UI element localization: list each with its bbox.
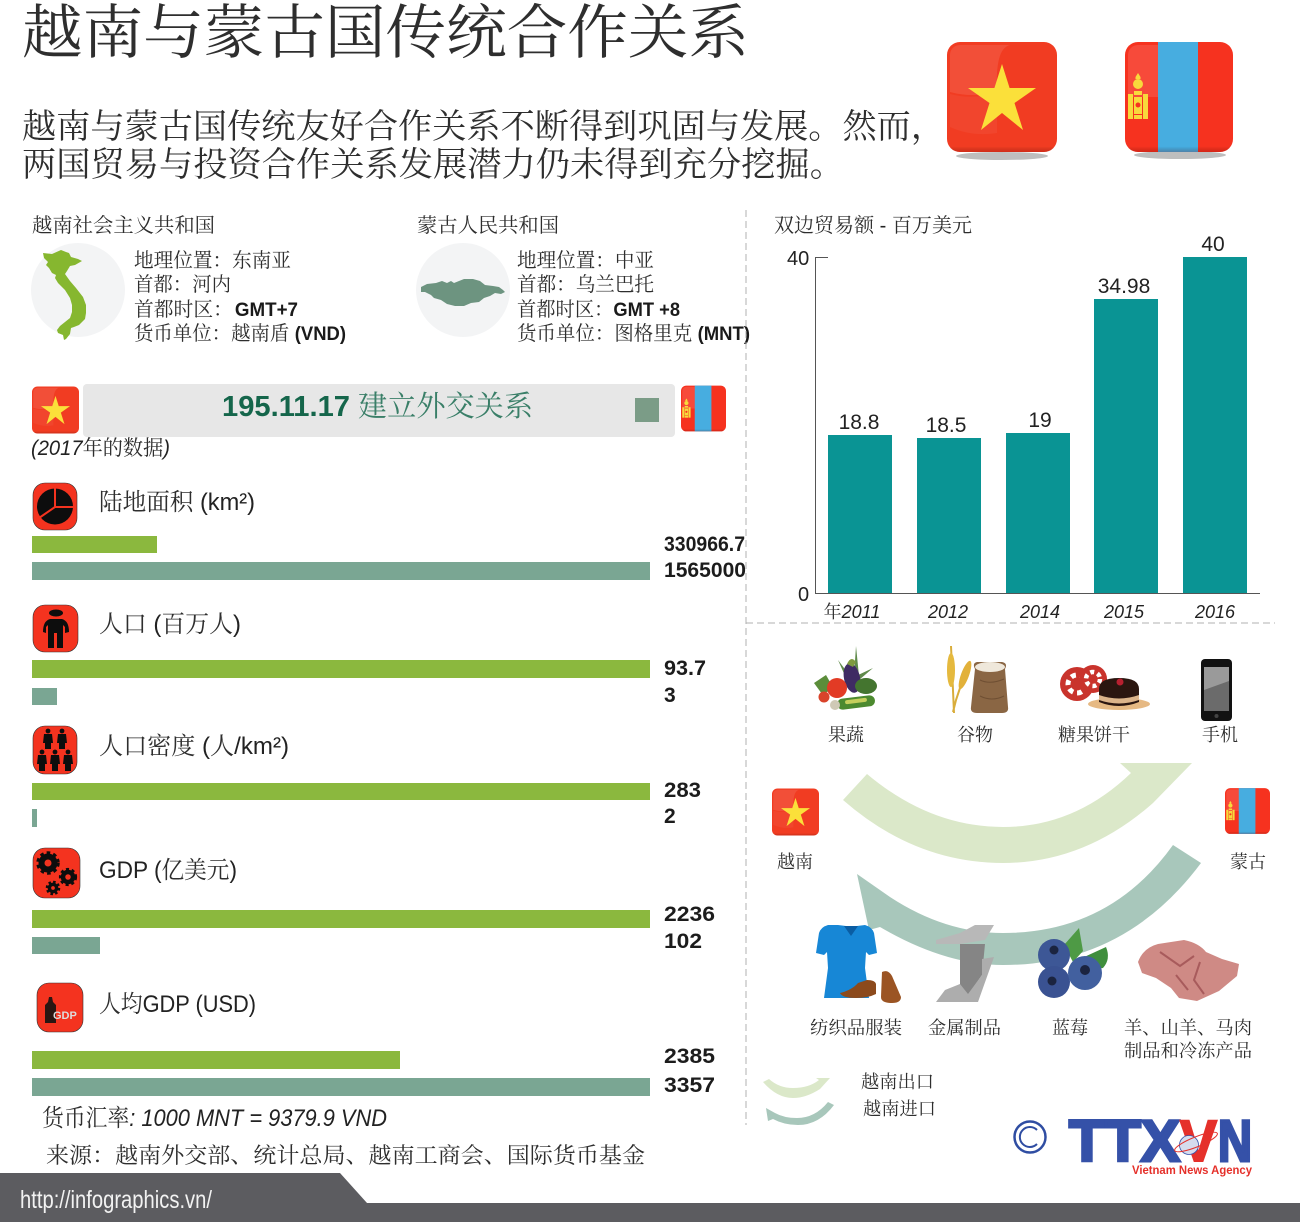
icon: large Vietnam flag [947,42,1057,160]
text: Vietnam details [134,249,346,345]
banner background [83,384,675,437]
bar: Mongolia population [32,688,57,705]
icon: GDP per person: GDP [53,1010,77,1022]
logo letters [1069,1109,1252,1174]
logo: TTXVN [1014,1109,1253,1177]
panel: Mongolia facts [416,214,750,345]
agency name: Vietnam News Agency [1132,1165,1253,1177]
label: 陆地面积 (km²) [99,489,255,516]
label: 纺织品服装 [810,1018,902,1038]
bar 2011: 年2011 [824,601,880,622]
icon: meat [1138,940,1239,1001]
value: 102 [664,930,702,953]
bar 2016 [1183,233,1247,622]
heading: Mongolia name: 蒙古人民共和国 [417,214,559,237]
bar chart: bilateral trade [774,214,1260,622]
icon: pie chart [33,483,77,530]
label: 羊、山羊、马肉 [1124,1018,1252,1038]
icon: Mongolia map [416,243,510,337]
panel: Vietnam facts [31,214,346,345]
value: 330966.7 [664,533,745,556]
value: 2385 [664,1045,715,1068]
data year note: (2017年的数据) [31,437,170,460]
value: 93.7 [664,657,706,680]
title: 越南与蒙古国传统合作关系 [22,0,749,66]
bar: Mongolia density [32,809,37,827]
copyright mark [1014,1122,1046,1152]
text: Vietnam details: 首都时区：GMT+7 [134,298,298,321]
label: 金属制品 [928,1018,1001,1038]
product: textiles [810,925,902,1038]
label: 果蔬 [828,725,864,745]
bar 2015: 2015 [1103,602,1145,622]
icon: vegetables [814,646,877,710]
text: Vietnam details: 货币单位：越南盾 (VND) [134,322,346,345]
label: 糖果饼干 [1058,725,1130,745]
bar 2014: 2014 [1019,602,1060,622]
chart axes [816,258,1260,594]
country: Mongolia [1225,788,1270,872]
legend: export label: 越南出口 [861,1071,934,1092]
label: 谷物 [957,725,993,745]
label: 蒙古 [1230,852,1266,872]
label: 蓝莓 [1052,1018,1088,1038]
chart title: 双边贸易额 - 百万美元 [774,214,972,237]
label: 人口 (百万人) [99,611,241,638]
footer bar [0,1173,1300,1222]
icon: person [33,605,78,652]
text: Mongolia details [517,249,750,345]
panel: land area [32,483,746,582]
banner text: 建立外交关系 [358,390,533,423]
bar: Vietnam GDP per capita [32,1051,400,1069]
bar: Vietnam GDP [32,910,650,928]
bar 2016: 2016 [1194,602,1236,622]
intro text: 两国贸易与投资合作关系发展潜力仍未得到充分挖掘。 [22,146,844,184]
label: 人口密度 (人/km²) [99,733,289,760]
icon: GDP per person [37,983,83,1032]
icon: mobile phone [1201,659,1232,721]
product: metal [928,925,1001,1038]
label: 越南 [777,851,813,872]
panel: population density [32,726,701,828]
axis label 40: 40 [787,248,809,270]
legend square [635,398,659,422]
product: vegetables [814,646,877,745]
legend: import arrow [766,1102,834,1125]
bar 2014 [1006,409,1070,622]
bar 2012 [917,414,981,622]
icon: large Mongolia flag [1125,42,1233,159]
value: 283 [664,779,701,802]
label [1124,1018,1252,1061]
label: 人均GDP (USD) [99,991,256,1018]
icon: shirt and shoes [816,925,901,1003]
arrow: Vietnam import [857,845,1201,965]
panel: GDP per capita [32,983,715,1097]
icon: small Vietnam flag [32,386,79,434]
value: 1565000 [664,559,746,582]
icon: Vietnam map [31,243,125,340]
banner date: 195.11.17 [222,391,350,423]
legend: import label: 越南进口 [863,1098,936,1119]
icon: gears [33,848,80,898]
icon: Mongolia flag [1225,788,1270,834]
bar 2015: 34.98 [1098,275,1150,298]
country: Vietnam [772,788,819,872]
value: 2236 [664,903,715,926]
product: grain [947,646,1008,745]
bar: Mongolia GDP [32,937,100,954]
panel: GDP [32,848,715,954]
axis label 0: 0 [798,584,809,606]
text: Mongolia details: 首都：乌兰巴托 [517,273,654,296]
bar: Vietnam population [32,660,650,678]
text: Vietnam details: 地理位置：东南亚 [134,249,291,272]
bar: Vietnam land area [32,536,157,553]
bar: Mongolia land area [32,562,650,580]
bar 2012: 2012 [927,602,968,622]
icon: wheat and sack [947,646,1008,713]
bar 2015 [1094,275,1158,622]
bar 2016: 40 [1201,233,1225,256]
source note: 来源：越南外交部、统计总局、越南工商会、国际货币基金 [46,1143,645,1168]
bar 2014: 19 [1028,409,1052,432]
icon: small Mongolia flag [681,386,726,431]
intro text: 越南与蒙古国传统友好合作关系不断得到巩固与发展。然而， [22,108,945,146]
logo letters: N [1218,1109,1252,1174]
logo letters: V [1180,1109,1217,1174]
logo letters: TTX [1069,1109,1180,1174]
product: confectionery [1058,665,1150,745]
product: meat [1124,940,1252,1061]
panel: diplomatic relations banner [32,384,726,437]
bar 2011 [824,411,892,622]
bar: Vietnam density [32,783,650,800]
icon: blueberries [1038,928,1108,998]
arrow: Vietnam export [843,763,1192,863]
icon: candy and cake [1060,665,1150,710]
value: 2 [664,805,676,828]
product: phone [1201,659,1238,745]
text: Mongolia details: 首都时区：GMT +8 [517,298,680,321]
label: GDP (亿美元) [99,857,237,884]
icon: group of people [33,726,77,774]
heading: Vietnam name: 越南社会主义共和国 [32,214,215,237]
bar 2011: 18.8 [839,411,879,434]
legend: export arrow [763,1078,830,1098]
panel: population [32,605,706,707]
text: Vietnam details: 首都：河内 [134,273,231,296]
text: Mongolia details: 货币单位：图格里克 (MNT) [517,322,750,345]
label: 制品和冷冻产品 [1124,1041,1252,1061]
website url: http://infographics.vn/ [20,1186,212,1214]
legend [763,1071,936,1125]
intro text [22,108,945,184]
bar 2012: 18.5 [926,414,966,437]
bar: Mongolia GDP per capita [32,1078,650,1096]
exchange rate note: 货币汇率: 1000 MNT = 9379.9 VND [42,1105,387,1132]
text: Mongolia details: 地理位置：中亚 [517,249,654,272]
product: blueberries [1038,928,1108,1038]
icon: steel beam [936,925,994,1002]
icon: Vietnam flag [772,788,819,836]
value: 3357 [664,1074,715,1097]
label: 手机 [1202,725,1238,745]
value: 3 [664,684,676,707]
